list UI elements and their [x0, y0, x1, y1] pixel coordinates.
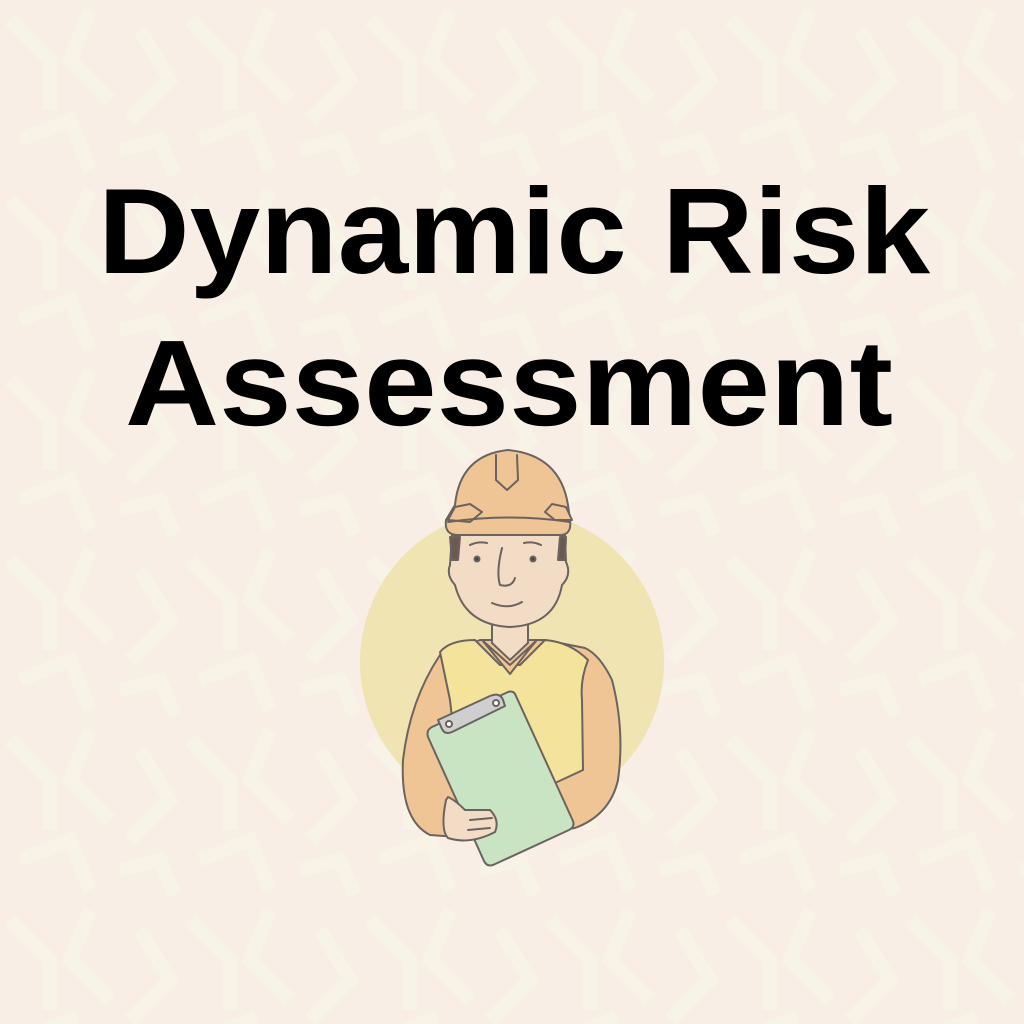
eyes, nose, mouth [474, 556, 480, 562]
hand [443, 797, 497, 840]
vest [440, 640, 588, 790]
clipboard [428, 692, 574, 866]
face [449, 535, 568, 627]
title: Assessment [125, 315, 893, 451]
illustration: worker with clipboard [360, 450, 664, 866]
neck [492, 620, 528, 660]
title [98, 163, 930, 451]
background circle [360, 510, 664, 814]
title: Dynamic Risk [98, 163, 930, 299]
helmet [446, 450, 570, 535]
body arms [403, 640, 620, 840]
shirt collar [482, 640, 537, 674]
